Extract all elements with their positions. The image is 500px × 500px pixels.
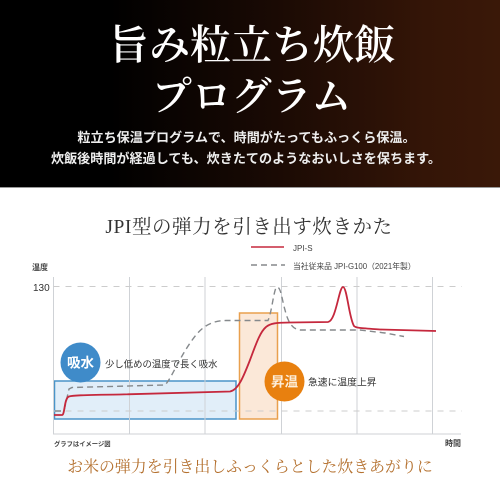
chart heading: JPI型の弾力を引き出す炊きかた xyxy=(105,217,393,238)
absorption caption: 少し低めの温度で長く吸水 xyxy=(105,358,218,370)
title line 1: 旨み粒立ち炊飯 xyxy=(108,22,395,68)
description line 1: 粒立ち保温プログラムで、時間がたってもふっくら保温。 xyxy=(77,130,416,144)
legend: JPI-S xyxy=(251,244,313,253)
heating caption: 急速に温度上昇 xyxy=(308,376,377,388)
graph note: グラフはイメージ図 xyxy=(54,439,111,448)
badge: absorption xyxy=(60,342,100,382)
red line: JPI-S xyxy=(54,287,436,415)
legend: JPI-S: JPI-S xyxy=(293,244,313,253)
title line 2: プログラム xyxy=(152,74,351,119)
dashed line: previous model xyxy=(55,287,404,411)
orange heating band xyxy=(240,313,278,419)
y axis label: 温度 xyxy=(32,262,48,272)
header panel xyxy=(0,0,500,188)
temperature chart xyxy=(32,244,462,448)
description line 2: 炊飯後時間が経過しても、炊きたてのようなおいしさを保ちます。 xyxy=(51,150,441,166)
badge: absorption: 吸水 xyxy=(67,356,94,370)
x axis label: 時間 xyxy=(445,438,461,448)
y axis value: 130 xyxy=(33,283,50,294)
blue absorption band xyxy=(54,381,236,419)
conclusion text: お米の弾力を引き出しふっくらとした炊きあがりに xyxy=(67,459,433,476)
badge: heating xyxy=(264,362,304,402)
legend: previous model: 当社従来品 JPI-G100（2021年製） xyxy=(293,261,416,271)
badge: heating: 昇温 xyxy=(271,374,298,390)
